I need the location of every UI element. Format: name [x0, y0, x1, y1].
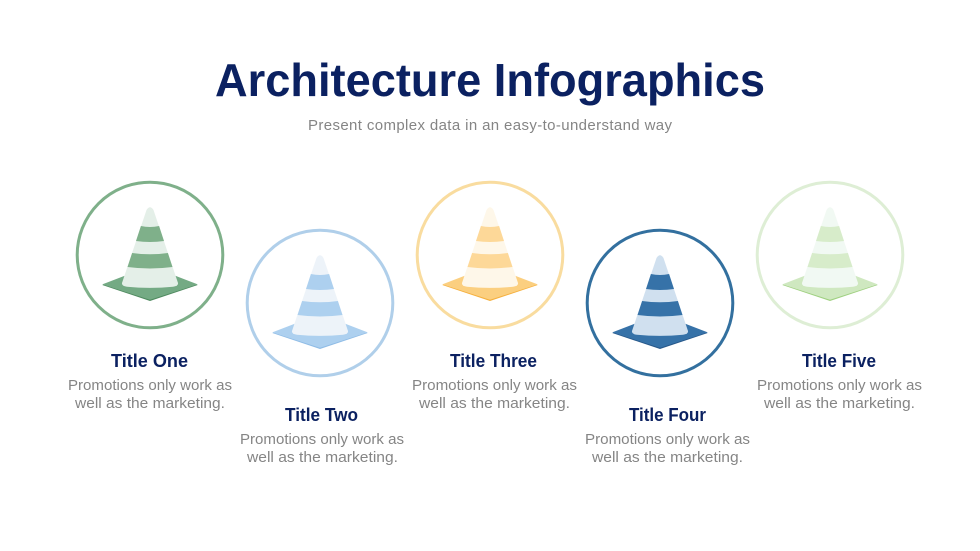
panel: title four — [585, 230, 750, 466]
icon: yellow ring — [417, 182, 563, 328]
icon: yellow traffic cone — [442, 207, 538, 301]
description — [757, 377, 922, 412]
heading: Title One — [111, 351, 188, 371]
description: well as the marketing. — [418, 395, 570, 412]
description: well as the marketing. — [763, 395, 915, 412]
heading: Title Three — [450, 351, 537, 371]
icon: light blue traffic cone — [272, 255, 368, 349]
icon: green ring — [77, 182, 223, 328]
description: Promotions only work as — [585, 431, 750, 448]
description: well as the marketing. — [246, 449, 398, 466]
heading: Title Four — [629, 405, 706, 425]
icon: pale green traffic cone — [782, 207, 878, 301]
panel: title two — [240, 230, 404, 466]
panel: title five — [757, 182, 922, 412]
icon: light blue ring — [247, 230, 393, 376]
icon: green traffic cone — [102, 207, 198, 301]
description: Promotions only work as — [757, 377, 922, 394]
subtitle: Present complex data in an easy-to-understand way — [308, 117, 672, 134]
icon: pale green ring — [757, 182, 903, 328]
panel: title one — [68, 182, 232, 412]
description: Promotions only work as — [68, 377, 232, 394]
description: Promotions only work as — [240, 431, 404, 448]
icon: dark blue traffic cone — [612, 255, 708, 349]
description: Promotions only work as — [412, 377, 577, 394]
title: Architecture Infographics — [215, 54, 765, 106]
description — [240, 431, 404, 466]
icon: dark blue ring — [587, 230, 733, 376]
panel: title three — [412, 182, 577, 412]
heading: Title Five — [802, 351, 876, 371]
description — [585, 431, 750, 466]
description: well as the marketing. — [74, 395, 225, 412]
heading: Title Two — [285, 405, 358, 425]
description: well as the marketing. — [591, 449, 743, 466]
description — [412, 377, 577, 412]
description — [68, 377, 232, 412]
